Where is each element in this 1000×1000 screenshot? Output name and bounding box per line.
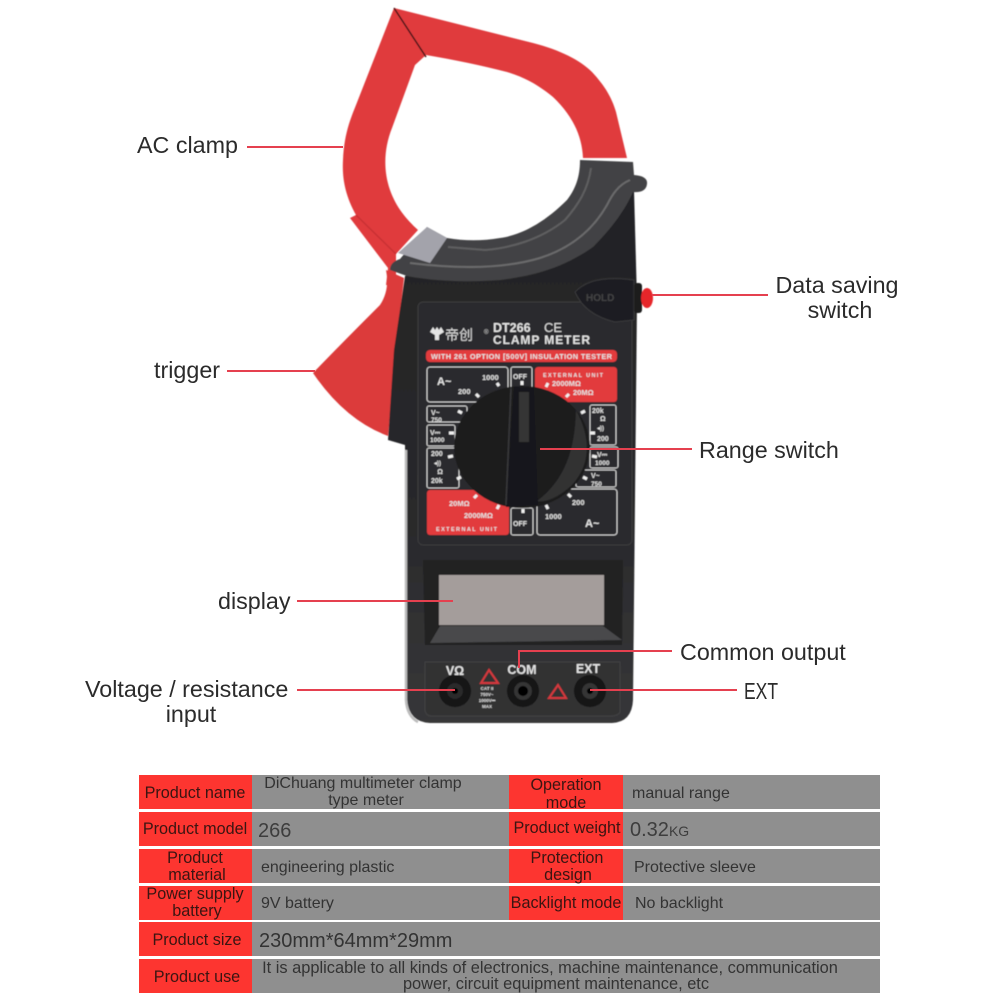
dial scale markings: OFF [513, 374, 528, 381]
jack panel: COM [507, 663, 537, 677]
row: power supply and backlight: No backlight [635, 895, 724, 912]
dial scale markings [427, 367, 618, 535]
jack panel: MAX [482, 704, 492, 709]
row: material and protection [139, 849, 880, 884]
row: material and protection: design [544, 866, 592, 884]
dial scale markings: 750 [431, 417, 442, 424]
dial scale markings: V~ [591, 473, 600, 480]
callout: common output: Common output [680, 639, 846, 665]
row: product name and operation mode: Product name [145, 784, 245, 802]
jack panel: 750V~ [480, 692, 494, 697]
dial scale markings: 20MΩ [573, 388, 594, 397]
callout: trigger: trigger [154, 357, 220, 383]
dial scale markings: V⎓ [430, 430, 441, 437]
dial scale markings: ◂)) [596, 426, 604, 432]
callout: data saving switch [652, 272, 899, 323]
row: material and protection: Protection [531, 849, 603, 867]
callout: voltage and resistance input: input [166, 701, 217, 727]
row: product size: 230mm*64mm*29mm [259, 930, 452, 952]
callout: range switch: Range switch [699, 437, 839, 463]
row: power supply and backlight: Backlight mode [511, 894, 621, 912]
row: product use [139, 959, 880, 993]
dial scale markings: V⎓ [597, 452, 608, 459]
callout: voltage and resistance input: Voltage / resistance [85, 676, 288, 702]
row: power supply and backlight: Power supply [146, 885, 244, 903]
trigger [313, 270, 404, 436]
callout: display: display [218, 588, 291, 614]
callout: common output [519, 639, 846, 668]
callout: EXT: EXT [744, 678, 778, 704]
illustration: clamp meter [313, 8, 653, 723]
row: product size: Product size [152, 931, 242, 949]
dial scale markings: 1000 [595, 460, 610, 467]
jack panel: 1000V⎓ [479, 698, 496, 703]
dial scale markings: 1000 [545, 512, 562, 521]
row: material and protection: material [168, 866, 226, 884]
callout: data saving switch: Data saving [775, 272, 899, 298]
row: product use: power, circuit equipment maintenance, etc [403, 975, 709, 993]
row: power supply and backlight: 9V battery [261, 895, 334, 912]
brand logo and model: ® [484, 329, 489, 336]
jack panel: CAT II [481, 686, 493, 691]
row: product name and operation mode: DiChuang multimeter clamp [264, 775, 462, 792]
row: power supply and backlight: battery [172, 902, 223, 920]
brand logo and model: DT266 [493, 321, 531, 335]
row: product name and operation mode: Operation [530, 776, 602, 794]
dial scale markings: A~ [585, 518, 600, 530]
jack panel [425, 662, 620, 716]
jack panel: VΩ [446, 664, 464, 678]
dial scale markings: 200 [572, 498, 585, 507]
row: product name and operation mode [139, 775, 880, 812]
dial scale markings: 2000MΩ [464, 511, 493, 520]
row: material and protection: Product [167, 849, 223, 867]
row: product name and operation mode: mode [546, 794, 586, 812]
dial scale markings: ◂)) [433, 461, 441, 467]
dial scale markings: EXTERNAL UNIT [543, 373, 604, 379]
meter body [388, 190, 637, 723]
row: material and protection: engineering plastic [261, 859, 394, 876]
row: product name and operation mode: manual range [632, 785, 730, 802]
callout: voltage and resistance input [85, 676, 455, 727]
range switch dial [454, 386, 590, 508]
dial scale markings: V~ [431, 410, 440, 417]
callout: AC clamp: AC clamp [137, 132, 238, 158]
LCD display [439, 575, 604, 625]
dial scale markings: 2000MΩ [552, 379, 581, 388]
upper dark jaw [390, 160, 647, 281]
row: power supply and backlight [139, 885, 880, 920]
dial scale markings: 200 [597, 436, 609, 443]
row: material and protection: Protective sleeve [634, 859, 756, 876]
hold button housing [575, 279, 653, 322]
dial scale markings: Ω [600, 416, 606, 423]
AC clamp jaw [343, 8, 627, 285]
row: product model and weight: 0.32KG [630, 819, 689, 841]
dial scale markings: OFF [513, 521, 528, 528]
row: product model and weight [139, 812, 880, 846]
brand logo and model: CE [544, 320, 562, 335]
dial scale markings: 200 [458, 387, 471, 396]
dial scale markings: 20k [431, 478, 443, 485]
callout: data saving switch: switch [808, 297, 872, 323]
display lower bevel [430, 626, 622, 643]
dial scale markings: 1000 [430, 437, 445, 444]
specification table [139, 775, 880, 993]
hold button housing: HOLD [586, 293, 614, 304]
brand logo and model [430, 320, 590, 347]
dial scale markings: EXTERNAL UNIT [436, 527, 498, 533]
dial scale markings: 20MΩ [449, 499, 470, 508]
dial scale markings: A~ [437, 376, 452, 388]
row: product model and weight: Product weight [513, 819, 621, 837]
row: product name and operation mode: type meter [328, 792, 404, 809]
dial scale markings: 20k [592, 408, 604, 415]
row: product use: Product use [154, 968, 240, 986]
row: product model and weight: Product model [143, 820, 247, 838]
display recess [423, 560, 623, 645]
row: product model and weight: 266 [258, 820, 291, 842]
dial scale markings: 750 [591, 481, 602, 488]
jack panel: EXT [576, 662, 601, 676]
dial scale markings: 200 [431, 451, 443, 458]
dial scale markings: 1000 [482, 373, 499, 382]
dial scale markings: Ω [437, 469, 443, 476]
brand logo and model: CLAMP METER [493, 333, 590, 347]
row: product use: It is applicable to all kinds of electronics, machine maintenance, communication [262, 959, 838, 977]
brand logo and model: 帝创 [445, 327, 473, 343]
row: product size [139, 922, 880, 956]
tester banner: WITH 261 OPTION [500V] INSULATION TESTER [431, 352, 613, 361]
